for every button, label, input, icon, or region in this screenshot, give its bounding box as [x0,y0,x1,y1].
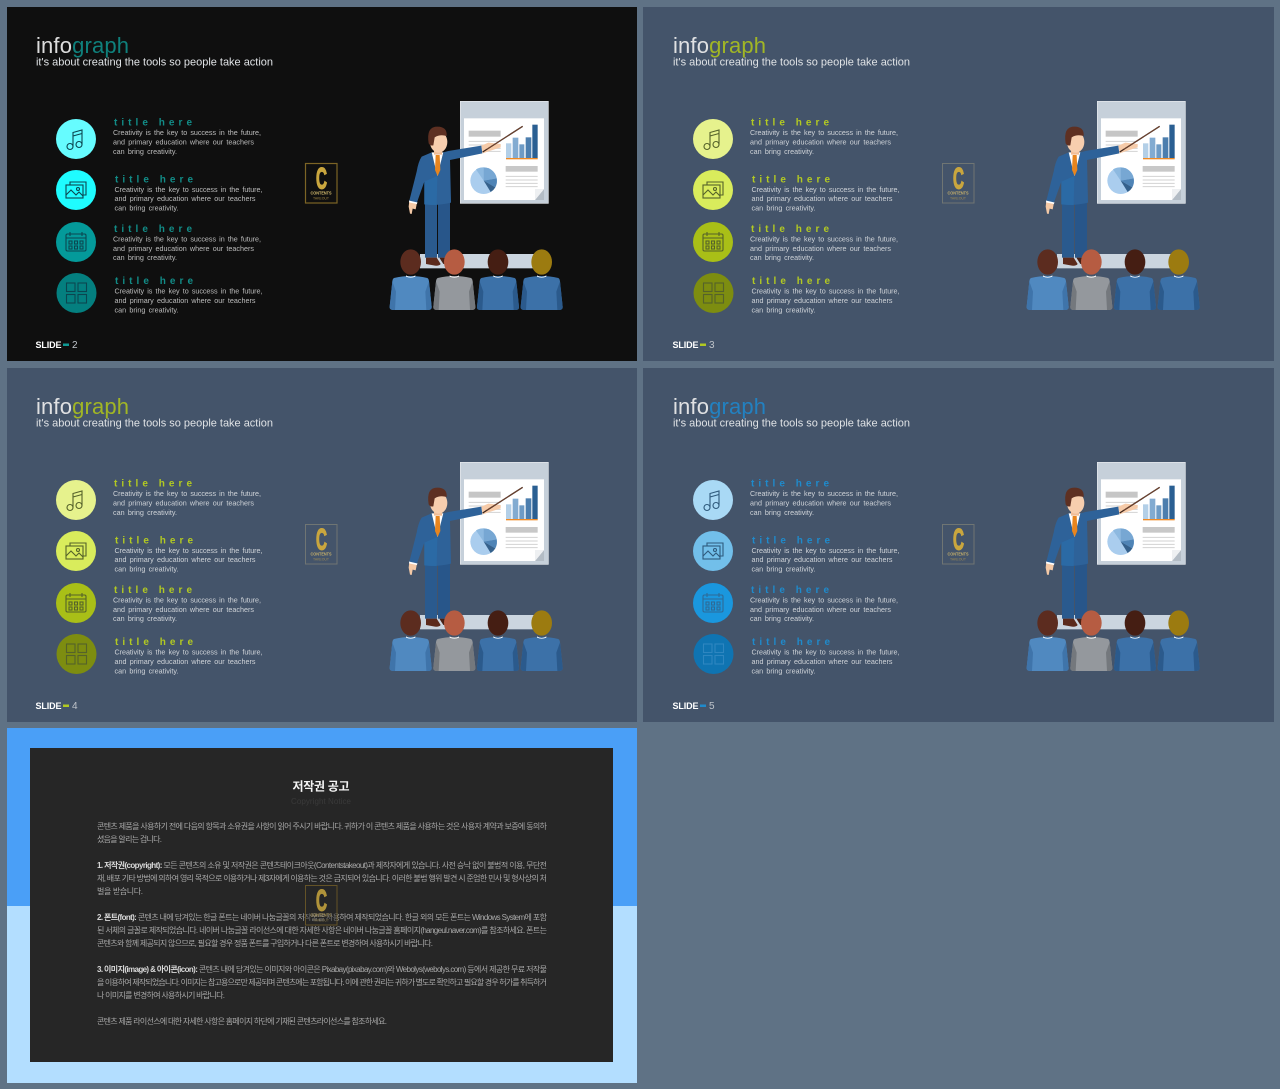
slide number [36,340,78,351]
heading: infograph [673,33,766,58]
slide number: 2 [72,340,78,351]
item 1: and primary education where our teachers [750,498,891,508]
item 4: can bring creativity. [114,306,178,314]
slide number: 4 [72,701,78,712]
heading [36,394,273,430]
clause 1: 1. 저작권(copyright): 모든 콘텐츠의 소유 및 저작권은 콘텐츠테이크아웃(Contentstakeout)과 제작자에게 있습니다. 사전 승낙 없이 불법적 이용, 무단전 [97,860,547,870]
item 4: title here [752,637,830,648]
item 3: and primary education where our teachers [113,244,254,253]
heading: it's about creating the tools so people take action [36,56,273,68]
copyright notice panel [7,728,637,1083]
item 2 [693,531,900,574]
item 4 [694,273,900,314]
item 4: title here [752,276,830,287]
item 1: title here [114,118,192,128]
logo [942,524,974,564]
clause 2: 2. 폰트(font): 콘텐츠 내에 담겨있는 한글 폰트는 네이버 나눔글꼴의 저작물을 사용하여 제작되었습니다. 한글 외의 모든 폰트는 Windows System에 포함 [97,912,548,922]
clause 2: 된 서체의 글꼴로 제작되었습니다. 네이버 나눔글꼴 라이선스에 대한 자세한 사항은 네이버 나눔글꼴 홈페이지(hangeul.naver.com)를 참조하세요. 폰트는 [97,925,547,935]
heading [36,33,273,68]
heading [673,394,910,430]
closing line: 콘텐츠 제품 라이선스에 대한 자세한 사항은 홈페이지 하단에 기재된 콘텐츠라이선스를 참조하세요. [97,1016,387,1026]
heading: it's about creating the tools so people take action [36,418,273,430]
heading: it's about creating the tools so people take action [673,418,910,430]
item 1: Creativity is the key to success in the future, [113,128,261,137]
logo: TAKEOUT [313,558,330,562]
logo: CONTENTS [948,552,968,556]
presenter illustration [1027,101,1200,310]
item 1: and primary education where our teachers [113,498,254,508]
item 4: can bring creativity. [752,306,816,314]
logo: TAKEOUT [950,558,967,562]
logo: CONTENTS [948,190,968,196]
item 1: can bring creativity. [113,508,177,517]
item 1 [693,118,898,159]
item 3 [56,222,261,262]
clause 3: 나 이미지를 변경하여 사용하시기 바랍니다. [97,990,225,1000]
item 2: title here [115,536,193,546]
slide number: SLIDE [36,701,62,711]
slide 5 panel (slate, blue) [643,368,1274,722]
item 2: can bring creativity. [114,204,178,212]
item 1: Creativity is the key to success in the future, [750,489,898,498]
item 2: can bring creativity. [752,564,816,574]
item 4: title here [115,637,193,648]
notice heading [291,778,352,806]
slide number: SLIDE [672,701,698,711]
logo [306,524,337,564]
item 4: Creativity is the key to success in the future, [114,286,262,296]
presenter illustration [390,462,563,671]
slide number [36,701,78,712]
logo: C [953,162,964,196]
logo: TAKEOUT [313,196,330,200]
slide number [672,340,715,351]
item 1: title here [751,118,829,128]
logo watermark: TAKEOUT [313,918,330,922]
notice heading: Copyright Notice [291,797,352,806]
item 2: Creativity is the key to success in the future, [752,546,900,555]
item 3: and primary education where our teachers [750,244,891,253]
item 3: can bring creativity. [113,253,177,262]
slide number: SLIDE [36,340,62,350]
logo: C [953,524,964,556]
item 2: Creativity is the key to success in the future, [114,185,262,194]
logo [306,162,337,203]
item 3: title here [114,224,192,235]
item 1: and primary education where our teachers [750,138,891,146]
item 2: can bring creativity. [114,564,178,574]
logo [942,162,974,203]
item 4: Creativity is the key to success in the future, [752,286,900,296]
item 1: and primary education where our teachers [113,138,254,146]
heading [673,33,910,68]
item 3: can bring creativity. [750,253,814,262]
slide number: 3 [709,340,715,351]
item 3: title here [751,585,829,596]
item 1: Creativity is the key to success in the future, [750,128,898,137]
clause 3: 3. 이미지(image) & 아이콘(icon): 콘텐츠 내에 담겨있는 이미지와 아이콘은 Pixabay(pixabay.com)와 Webolys(webolys.com) 등에서 제공한 무료 저작물 [97,964,547,974]
heading: it's about creating the tools so people take action [673,56,910,68]
logo: TAKEOUT [950,196,967,200]
item 3: Creativity is the key to success in the future, [750,596,898,604]
item 4: and primary education where our teachers [114,657,256,666]
item 3 [693,222,898,262]
item 2: and primary education where our teachers [114,555,256,564]
heading: infograph [673,394,766,419]
item 3: title here [751,224,829,235]
item 4: can bring creativity. [752,666,816,676]
item 3: can bring creativity. [113,614,177,623]
item 1: Creativity is the key to success in the future, [113,489,261,498]
logo: CONTENTS [310,552,332,556]
item 3: Creativity is the key to success in the future, [113,234,261,244]
item 3: can bring creativity. [750,614,814,623]
item 2: and primary education where our teachers [752,194,893,203]
clause 1: 벌을 받습니다. [97,886,143,896]
item 2: title here [115,174,193,186]
logo watermark: C [316,884,327,918]
logo watermark: CONTENTS [310,912,332,918]
logo: C [316,524,327,556]
item 3: Creativity is the key to success in the future, [113,596,261,604]
item 4 [56,273,262,314]
item 1: can bring creativity. [113,147,177,156]
intro paragraph [97,821,548,844]
slide 2 panel (black, teal) [7,7,637,361]
item 4 [694,634,900,676]
item 1: title here [751,478,829,490]
slide number: SLIDE [672,340,698,350]
item 4: title here [115,276,193,287]
slide number [672,701,715,712]
item 2: Creativity is the key to success in the future, [752,185,900,194]
item 3: and primary education where our teachers [750,605,891,614]
heading: infograph [36,33,129,58]
logo: C [316,162,327,196]
item 1 [56,478,261,520]
slide number: 5 [709,701,715,712]
item 1 [56,118,261,159]
item 3: and primary education where our teachers [113,605,254,614]
notice heading: 저작권 공고 [292,778,350,794]
item 4: can bring creativity. [114,666,178,676]
item 4: Creativity is the key to success in the future, [752,648,900,656]
item 4 [56,634,262,676]
logo watermark [306,884,337,925]
item 2 [56,531,262,574]
presenter illustration [1027,462,1200,671]
presenter illustration [390,101,563,310]
item 1: title here [114,478,192,490]
item 1: can bring creativity. [750,508,814,517]
item 4: and primary education where our teachers [752,657,893,666]
item 3: title here [114,585,192,596]
item 3: Creativity is the key to success in the future, [750,234,898,244]
item 4: Creativity is the key to success in the future, [114,648,262,656]
item 2: can bring creativity. [752,204,816,212]
logo: CONTENTS [310,190,332,196]
clause 2 [97,912,548,948]
clause 2: 콘텐츠와 함께 제공되지 않으므로, 필요할 경우 정품 폰트를 구입하거나 다른 폰트로 변경하여 사용하시기 바랍니다. [97,938,433,948]
item 2: Creativity is the key to success in the future, [114,546,262,555]
heading: infograph [36,394,129,419]
item 4: and primary education where our teachers [114,296,256,305]
item 1: can bring creativity. [750,147,814,156]
item 2: title here [752,174,830,186]
item 2 [693,170,900,212]
intro paragraph: 콘텐츠 제품을 사용하기 전에 다음의 항목과 소유권을 사항이 읽어 주시기 바랍니다. 귀하가 이 콘텐츠 제품을 사용하는 것은 사용자 계약과 보증에 동의하 [97,821,548,831]
clause 3: 을 이용하여 제작되었습니다. 이미지는 참고용으로만 제공되며 콘텐츠에는 포함됩니다. 이에 관한 권리는 귀하가 별도로 확인하고 필요할 경우 허가를 취득하거 [97,977,547,987]
clause 1: 재, 배포 기타 방법에 의하여 영리 목적으로 이용하거나 제3자에게 이용하는 것은 금지되어 있습니다. 이러한 불법 행위 발견 시 준엄한 민사 및 형사상의 처 [97,873,547,883]
item 1 [693,478,898,520]
item 2 [56,170,262,212]
item 3 [693,583,898,623]
item 2: title here [752,536,830,546]
item 4: and primary education where our teachers [752,296,893,305]
item 3 [56,583,261,623]
slide 3 panel (slate, lime) [643,7,1274,361]
slide 4 panel (slate, lime) [7,368,637,722]
clause 1 [97,860,547,896]
clause 3 [97,964,547,1000]
item 2: and primary education where our teachers [752,555,893,564]
item 2: and primary education where our teachers [114,194,256,203]
intro paragraph: 셨음을 알리는 겁니다. [97,834,162,844]
